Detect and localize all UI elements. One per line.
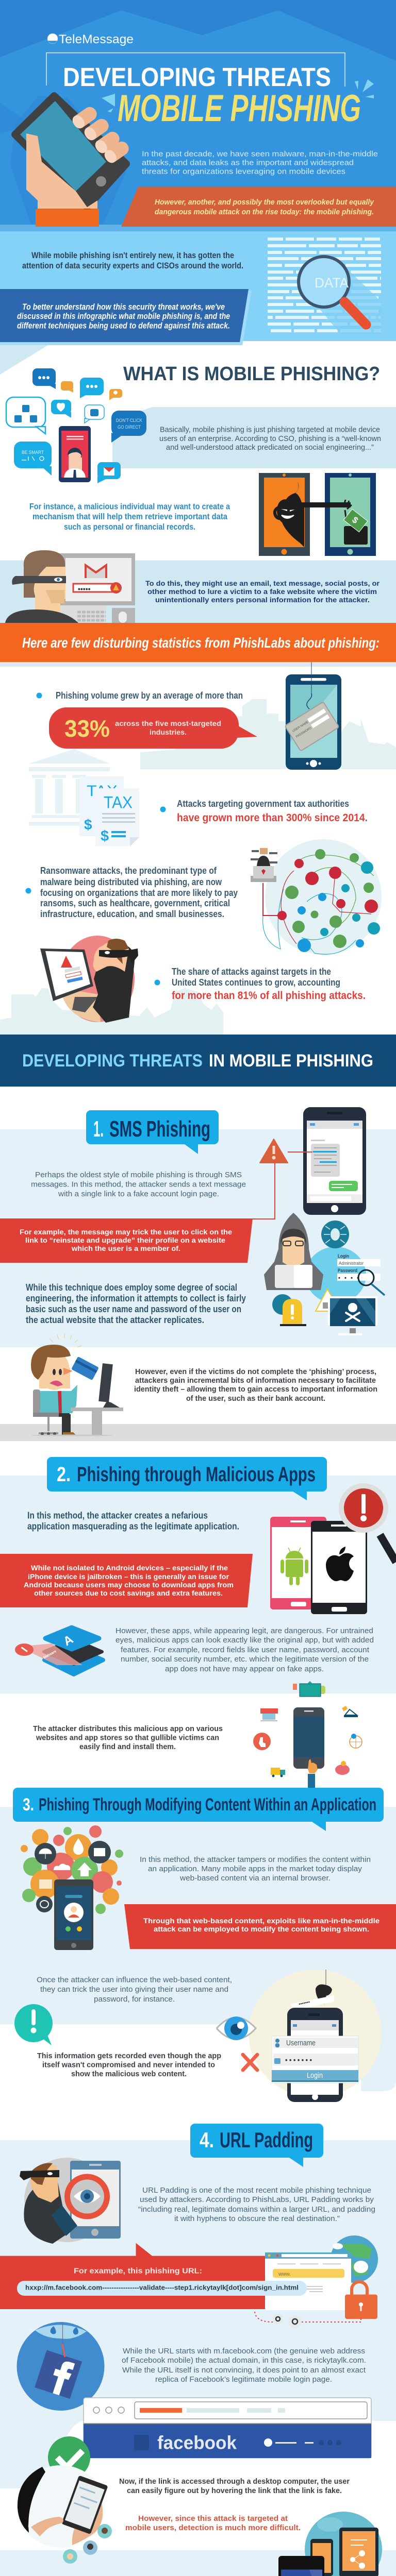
icon: app store phone and commerce icons (253, 1681, 362, 1788)
icon: monster stealing money through phones: $ (350, 515, 360, 526)
panel: lure text band: To do this, they might use an email, text message, social posts, or (145, 579, 380, 587)
text: identity theft: identity theft – allowing them to gain access to important information (134, 1385, 377, 1394)
icon: chat bubbles around phone: BE SMART (22, 450, 44, 455)
decorative skyline (140, 699, 396, 769)
text: SMS explanation: with a single link to a fake account login page. (58, 1190, 219, 1198)
title frame (46, 53, 345, 87)
heading: 3 modifying content: 3. (23, 1795, 34, 1815)
panel: distribution white area (0, 1693, 396, 1814)
icon: spy with megaphone eye (20, 2158, 121, 2244)
heading: 4 URL padding (190, 2124, 323, 2167)
title: developing threats: DEVELOPING THREATS (63, 62, 331, 92)
icon: data wall with magnifier (268, 239, 381, 334)
text: tampers content (140, 1855, 371, 1883)
panel: identity theft background (0, 1347, 396, 1424)
text: URL starts with: of Facebook mobile) the actual domain, in this case, is rickytaylk.com. (122, 2356, 366, 2365)
callout: SMS example: link to “reinstate and upgrade” their profile on a website (25, 1236, 225, 1244)
icon: infected network (251, 839, 382, 955)
heading: 1 SMS phishing: 1. (93, 1116, 104, 1142)
text: mobile detection difficult: However, since this attack is targeted at (138, 2514, 288, 2523)
stat 2: tax attacks (160, 799, 368, 824)
icon: monster stealing money through phones (259, 473, 376, 556)
text: desktop hovering: can easily figure out by hovering the link that the link is fake. (127, 2486, 342, 2495)
callout: android issue (0, 1554, 253, 1607)
band: grey floor (0, 1424, 396, 1441)
stat 3: ransomware: focusing on organizations that are more likely to pay (40, 888, 238, 898)
icon: alert bubble (14, 2004, 53, 2045)
stat 1: phishing volume: Phishing volume grew by an average of more than (56, 690, 243, 701)
text: technique limits: engineering, the information it attempts to collect is fairly (26, 1293, 246, 1303)
stat 3: ransomware: Ransomware attacks, the predominant type of (40, 866, 217, 876)
icon: facebook browser window (84, 2398, 371, 2458)
callout: what this infographic covers: discussed in this infographic what mobile phishing is, and the (17, 311, 230, 321)
text: apps appearing legit (116, 1626, 374, 1673)
icon: login phone with spy and eye: Login (307, 2071, 323, 2080)
stat 1: phishing volume: across the five most-targeted (115, 719, 221, 727)
stat 2: tax attacks: Attacks targeting government tax authorities (177, 799, 349, 809)
heading: 3 modifying content (13, 1788, 384, 1831)
text: tampers content: In this method, the attacker tampers or modifies the content within (140, 1855, 371, 1864)
icon: malicious app stack (15, 1628, 103, 1674)
decorative skyline (0, 988, 223, 1035)
heading band: developing threats in mobile phishing (0, 1035, 396, 1087)
panel: hero background (0, 0, 396, 231)
text: URL starts with (122, 2347, 366, 2384)
text: apps appearing legit: number, social security number, etc. which the legitimate version of the (121, 1655, 369, 1664)
text: desktop hovering: Now, if the link is accessed through a desktop computer, the user (119, 2477, 350, 2486)
icon: hacker at computer: ••••• (78, 585, 91, 593)
icon: phone with phishing hook (285, 662, 341, 770)
callout: overlooked attack (121, 187, 396, 227)
callout: SMS example: For example, the message may trick the user to click on the (20, 1228, 232, 1236)
callout: overlooked attack: However, another, and possibly the most overlooked but equally (155, 198, 374, 207)
text: technique limits: basic such as the user name and password of the user on (26, 1304, 241, 1314)
panel: section 1 background (0, 1129, 396, 1347)
panel: section 2 background (0, 1476, 396, 1694)
stat 4: united states share: United States continues to grow, accounting (172, 977, 340, 988)
stat 3: ransomware (26, 866, 238, 919)
callout: SMS example (0, 1218, 253, 1263)
text: identity theft: However, even if the victims do not complete the ‘phishing’ process, (135, 1367, 376, 1376)
icon: hacker at computer (5, 550, 135, 623)
panel: white area around browser (0, 2421, 396, 2550)
callout: what this infographic covers: To better understand how this security threat works, we've (22, 302, 225, 312)
stat 4: united states share (155, 967, 366, 1002)
heading band: developing threats in mobile phishing: IN MOBILE PHISHING (209, 1051, 373, 1071)
text: influence content: they can trick the user into giving their user name and (40, 1985, 228, 1994)
icon: login phone with spy and eye: Username (286, 2039, 316, 2047)
icon: hacker typing at monitor (40, 936, 138, 1023)
icon: title sparks (102, 79, 374, 112)
text: identity theft: of the user, such as their bank account. (186, 1394, 325, 1403)
icon: app icons cloud around phone (21, 1825, 123, 1950)
callout: phishing URL example (0, 2243, 268, 2309)
icon: login phone with spy and eye: ••••••• (298, 1999, 310, 2007)
stat 4: united states share: for more than 81% of all phishing attacks. (172, 990, 366, 1002)
callout: man in the middle: Through that web-based content, exploits like man-in-the-middle (143, 1917, 380, 1925)
heading: 1 SMS phishing: SMS Phishing (109, 1116, 210, 1142)
text: influence content: password, for instance. (94, 1995, 175, 2004)
stat 2: tax attacks: have grown more than 300% since 2014. (177, 812, 368, 824)
icon: phone with phishing hook: USER NAME (292, 721, 309, 733)
text: mobile detection difficult (125, 2514, 301, 2532)
callout: man in the middle (124, 1904, 396, 1949)
text: nefarious application (27, 1511, 239, 1531)
panel: lure text band: other method to lure a victim to a fake website where the victim (147, 587, 377, 596)
heading: 4 URL padding: 4. (200, 2128, 214, 2152)
text: malicious individual (29, 502, 230, 532)
icon: hooded hacker with login (264, 1213, 385, 1335)
heading: 2 malicious apps: 2. (57, 1463, 71, 1486)
icon: facebook browser window: facebook (157, 2432, 237, 2453)
icon: hand holding phone (10, 96, 131, 227)
stat 1: phishing volume (36, 690, 257, 749)
icon: browser globe and padlock (255, 2235, 378, 2328)
text: URL padding: it with hyphens to obscure the real destination.” (174, 2214, 340, 2223)
heading: 1 SMS phishing (86, 1110, 219, 1154)
text: attention of experts: attention of data security experts and CISOs around the world. (22, 261, 243, 270)
text: information recorded: show the malicious web content. (71, 2070, 187, 2078)
icon: bank and tax documents: $ (84, 817, 92, 833)
text: distributes apps: easily find and install them. (79, 1742, 176, 1751)
text: URL starts with: replica of Facebook’s legitimate mobile login page. (155, 2375, 332, 2384)
text: identity theft: attackers gain incremental bits of information necessary to facilitate (135, 1376, 376, 1385)
text: tampers content: web-based content via an internal browser. (179, 1874, 331, 1883)
icon: malicious app stack: A (61, 1632, 76, 1649)
text: apps appearing legit: However, these apps, while appearing legit, are dangerous. For untrained (116, 1626, 373, 1635)
text: information recorded (37, 2052, 221, 2078)
icon: warning triangle with connector (0, 1139, 312, 1219)
text: URL padding: “including real, legitimate domains within a larger URL, and padding (138, 2205, 375, 2214)
text: mobile detection difficult: mobile users, detection is much more difficult. (125, 2523, 301, 2532)
icon: woman using phone (16, 2465, 112, 2564)
text: attention of experts (22, 250, 243, 270)
icon: browser globe and padlock: www. (278, 2272, 291, 2277)
icon: hooded hacker with login: Login (338, 1253, 349, 1259)
icon: bank and tax documents: TAX (104, 793, 133, 812)
heading band: statistics (0, 623, 396, 667)
icon: bank and tax documents: $ (101, 828, 109, 844)
text: tampers content: an application. Many mobile apps in the market today display (148, 1865, 362, 1873)
panel: definition: and well-understood attack predicated on social engineering...” (166, 443, 374, 452)
text: phishing URL pill: hxxp://m.facebook.com----------------validate----step1.rickytaylk[dot]com/sign_in.html (25, 2284, 299, 2292)
text: intro: In the past decade, we have seen malware, man-in-the-middle (142, 149, 378, 159)
text: information recorded: itself wasn't compromised and never intended to (42, 2061, 215, 2069)
panel: lure text band (0, 561, 396, 623)
text: influence content: Once the attacker can influence the web-based content, (37, 1975, 232, 1985)
panel: lure text band: unintentionally enters personal information for the attacker. (155, 596, 370, 604)
text: distributes apps: The attacker distributes this malicious app on various (33, 1724, 223, 1733)
text: nefarious application: In this method, the attacker creates a nefarious (27, 1511, 208, 1521)
callout: android issue: Android because users may choose to download apps from (24, 1581, 234, 1589)
heading: 2 malicious apps (47, 1457, 327, 1500)
panel: light blue intro band (0, 231, 396, 341)
callout: what this infographic covers: different techniques being used to defend against this attack. (17, 320, 230, 331)
heading band: developing threats in mobile phishing: DEVELOPING THREATS (22, 1051, 203, 1071)
callout: SMS example: which the user is a member of. (71, 1244, 180, 1252)
text: SMS explanation: messages. In this method, the attacker sends a text message (31, 1180, 246, 1189)
icon: SMS phone (303, 1107, 366, 1215)
callout: android issue: iPhone device is jailbroken – this is generally an issue for (28, 1572, 229, 1581)
icon: android and apple phones with magnifier (270, 1483, 396, 1614)
text: malicious individual: For instance, a malicious individual may want to create a (29, 502, 230, 512)
text: apps appearing legit: features. For example, record fields like user name, password, account (121, 1646, 370, 1654)
icon: green check (48, 2436, 90, 2479)
icon: bank and tax documents: TAX (87, 783, 118, 800)
stat 3: ransomware: ransoms, such as healthcare, government, critical (40, 898, 230, 908)
icon: bank and tax documents (29, 749, 139, 846)
heading: what is mobile phishing: WHAT IS MOBILE PHISHING? (123, 363, 380, 385)
text: intro (142, 149, 378, 176)
icon: malicious app stack: Malware (43, 1650, 57, 1660)
text: apps appearing legit: eyes, malicious apps can look exactly like the original app, but with added (116, 1636, 374, 1645)
icon: devices and magnifier on facebook phone (278, 2512, 382, 2576)
text: nefarious application: application masquerading as the legitimate application. (27, 1521, 239, 1531)
logo: TeleMessage header: TeleMessage (59, 32, 134, 46)
icon: data wall with magnifier: DATA (315, 275, 349, 291)
panel: section 3 background (0, 1807, 396, 2091)
text: intro: threats for organizations leveraging on mobile devices (142, 167, 345, 176)
text: malicious individual: mechanism that will help them retrieve important data (32, 512, 227, 521)
stat 1: phishing volume: 33% (64, 715, 110, 742)
panel: section 4 background (0, 2140, 396, 2576)
callout: overlooked attack: dangerous mobile attack on the rise today: the mobile phishing. (155, 208, 374, 216)
text: influence content (37, 1975, 232, 2004)
icon: chat bubbles around phone: GO DIRECT (118, 425, 141, 430)
text: intro: attacks, and data leaks as the important and widespread (142, 159, 354, 167)
text: SMS explanation: Perhaps the oldest style of mobile phishing is through SMS (35, 1171, 242, 1179)
heading: 2 malicious apps: Phishing through Malicious Apps (77, 1463, 316, 1486)
callout: phishing URL example: For example, this phishing URL: (74, 2267, 202, 2275)
text: desktop hovering (119, 2477, 350, 2495)
icon: login phone with spy and eye (217, 1970, 382, 2102)
text: phishing URL pill (17, 2281, 307, 2296)
text: technique limits (26, 1282, 246, 1325)
text: information recorded: This information gets recorded even though the app (37, 2052, 221, 2060)
stat 4: united states share: The share of attacks against targets in the (172, 967, 331, 977)
stat 3: ransomware: malware being distributed via phishing, are now (40, 877, 222, 887)
icon: hooded hacker with login: Administrator (339, 1261, 364, 1266)
stat 3: ransomware: infrastructure, education, and small businesses. (40, 909, 224, 919)
panel: definition: users of an enterprise. According to CSO, phishing is a “well-known (159, 434, 381, 443)
text: URL starts with: While the URL starts with m.facebook.com (the genuine web address (123, 2347, 365, 2355)
stat 1: phishing volume: industries. (150, 728, 187, 736)
icon: chat bubbles around phone: DON'T CLICK (116, 418, 142, 423)
text: technique limits: While this technique does employ some degree of social (26, 1282, 237, 1293)
panel: definition: Basically, mobile phishing is just phishing targeted at mobile device (160, 426, 380, 434)
icon: login phone with spy and eye: ••••••• (285, 2056, 312, 2064)
text: technique limits: the actual website that the attacker replicates. (26, 1315, 204, 1325)
callout: man in the middle: attack can be employed to modify the content being shown. (154, 1925, 369, 1933)
callout: what this infographic covers (0, 289, 252, 345)
panel: definition (112, 407, 396, 468)
text: URL padding (138, 2186, 375, 2223)
text: identity theft (134, 1367, 377, 1403)
icon: worried man losing card (31, 1333, 123, 1436)
icon: chat bubbles around phone (6, 368, 146, 483)
text: malicious individual: such as personal or financial records. (64, 522, 195, 532)
heading: 4 URL padding: URL Padding (220, 2128, 313, 2152)
text: URL padding: used by attackers. According to PhishLabs, URL Padding works by (140, 2195, 374, 2204)
icon: hooded hacker with login: Password (338, 1268, 357, 1273)
decorative corner (0, 345, 48, 375)
text: URL padding: URL Padding is one of the most recent mobile phishing technique (142, 2186, 371, 2195)
callout: android issue: other sources due to cost savings and extra features. (34, 1589, 223, 1597)
text: URL starts with: While the URL itself is not convincing, it does point to an almost exact (122, 2366, 366, 2375)
text: attention of experts: While mobile phishing isn't entirely new, it has gotten the (31, 250, 234, 260)
text: distributes apps (33, 1724, 223, 1751)
icon: phone with phishing hook: PASSWORD (295, 726, 312, 739)
text: SMS explanation (31, 1171, 246, 1198)
text: distributes apps: websites and app stores so that gullible victims can (36, 1733, 219, 1742)
callout: android issue: While not isolated to Android devices – especially if the (31, 1564, 228, 1572)
icon: hooded hacker with login: •••• (338, 1275, 359, 1281)
text: apps appearing legit: app does not have may appear on fake apps. (165, 1665, 324, 1673)
icon: hooked facebook card (16, 2322, 104, 2411)
